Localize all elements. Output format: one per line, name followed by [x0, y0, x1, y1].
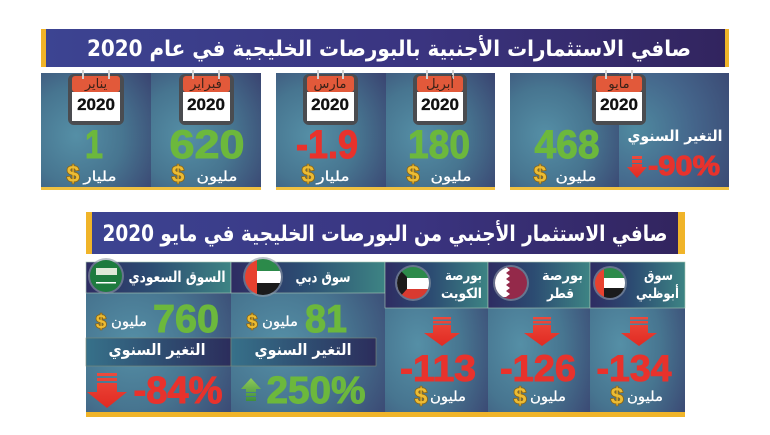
icon: calendar April: أبريل [426, 75, 454, 92]
market name: أبوظبي [636, 284, 679, 302]
icon: down arrow [424, 317, 460, 346]
unit: مليون [196, 169, 238, 185]
unit: مليون [430, 389, 466, 405]
top heading banner: صافي الاستثمارات الأجنبية بالبورصات الخليجية في عام 2020 [87, 34, 691, 62]
header [86, 262, 231, 293]
change value: -84% [134, 370, 222, 412]
market name: سوق [644, 268, 673, 284]
unit: مليون [430, 169, 472, 185]
header [590, 262, 685, 308]
unit: $ [172, 161, 185, 187]
icon: calendar March: مارس [313, 77, 347, 92]
icon: Kuwait flag [395, 265, 431, 301]
value: 760 [153, 298, 219, 341]
icon: calendar January: يناير [84, 77, 108, 92]
value: 180 [408, 123, 470, 167]
unit: مليار [82, 169, 116, 185]
icon: UAE flag [593, 266, 627, 300]
panel: Saudi market [86, 258, 231, 417]
icon: calendar February: فبراير [189, 77, 222, 92]
icon: down arrow [621, 317, 657, 346]
unit: $ [302, 161, 315, 187]
icon: calendar May: مايو [607, 77, 630, 92]
unit [514, 383, 566, 409]
unit: $ [407, 161, 420, 187]
annual change bar: التغير السنوي [108, 341, 206, 360]
panel: May [510, 70, 729, 190]
header [231, 262, 385, 293]
icon: calendar January [68, 70, 124, 125]
unit: $ [534, 161, 547, 187]
icon: down arrow [87, 373, 127, 408]
header [385, 262, 488, 308]
panel: Qatar bourse [488, 262, 590, 417]
unit [302, 161, 350, 187]
value: 468 [534, 123, 600, 167]
unit [415, 383, 466, 409]
unit: $ [514, 383, 527, 409]
icon: calendar February: 2020 [187, 95, 225, 114]
unit [611, 383, 663, 409]
icon: down arrow [627, 156, 647, 178]
value: -113 [400, 348, 476, 389]
icon: calendar May: 2020 [600, 95, 638, 114]
top heading banner [41, 29, 729, 67]
unit: مليون [262, 314, 298, 330]
market name: سوق دبي [296, 268, 350, 286]
bourse name [542, 268, 583, 302]
bourse name: بورصة [542, 268, 583, 284]
unit: $ [247, 312, 258, 333]
icon: calendar February [179, 70, 234, 125]
unit: مليون [111, 314, 147, 330]
unit: $ [67, 161, 80, 187]
header [488, 262, 590, 308]
unit [407, 161, 472, 187]
unit [247, 312, 298, 333]
icon: calendar March: 2020 [311, 95, 349, 114]
unit: مليون [530, 389, 566, 405]
annual change bar [231, 338, 376, 366]
value: 81 [305, 298, 347, 341]
panel: February [151, 70, 261, 190]
bourse name: بورصة [445, 268, 482, 284]
panel: Abu Dhabi market [590, 262, 685, 417]
icon: calendar April [413, 70, 467, 125]
value: -1.9 [296, 123, 358, 167]
icon: calendar January: 2020 [77, 95, 115, 114]
panel: March [276, 70, 386, 190]
unit: مليار [315, 169, 350, 185]
bourse name: قطر [546, 286, 574, 302]
annual change bar [86, 338, 231, 366]
icon: calendar April: 2020 [421, 95, 459, 114]
market name: السوق السعودي [128, 268, 226, 287]
annual change label: التغير السنوي [628, 127, 722, 146]
bourse name [441, 268, 482, 302]
icon: UAE flag [243, 257, 283, 297]
unit [534, 161, 596, 187]
value: 1 [85, 123, 103, 167]
unit: $ [96, 312, 107, 333]
change value: 250% [266, 370, 366, 412]
unit: $ [611, 383, 624, 409]
panel: Dubai market [231, 257, 385, 417]
icon: Saudi flag [88, 258, 124, 294]
unit: مليون [556, 169, 596, 185]
panel: April [386, 70, 495, 190]
unit: $ [415, 383, 428, 409]
icon: calendar March [303, 70, 358, 125]
bottom heading banner [86, 212, 685, 254]
icon: down arrow [524, 317, 560, 346]
market name [636, 268, 679, 302]
icon: calendar May [592, 70, 646, 125]
unit [67, 161, 116, 187]
icon: Qatar flag [493, 265, 529, 301]
icon: up arrow [241, 378, 261, 401]
value: -126 [500, 348, 576, 389]
annual change bar: التغير السنوي [254, 341, 352, 360]
unit [172, 161, 238, 187]
panel: January [41, 70, 151, 190]
unit [96, 312, 147, 333]
bourse name: الكويت [441, 286, 482, 302]
value: 620 [170, 123, 244, 167]
annual change value: -90% [648, 150, 720, 181]
value: -134 [596, 348, 672, 389]
bottom heading banner: صافي الاستثمار الأجنبي من البورصات الخليجية في مايو 2020 [103, 219, 668, 247]
panel: Kuwait bourse [385, 262, 488, 417]
unit: مليون [627, 389, 663, 405]
